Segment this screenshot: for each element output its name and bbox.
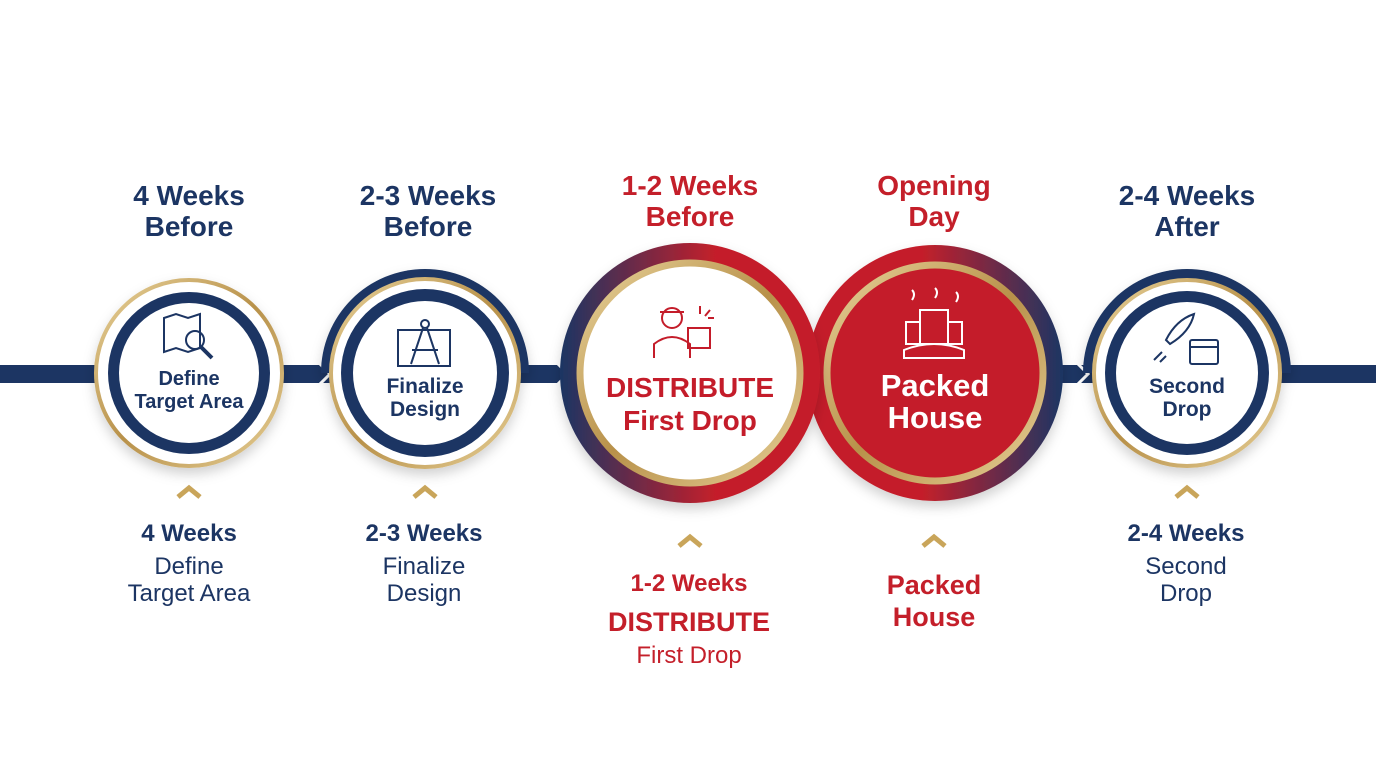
step 3 circle: First Drop bbox=[623, 405, 757, 436]
arrow 3 bbox=[1076, 362, 1088, 386]
step 2 circle: Design bbox=[390, 398, 460, 421]
label: Packed House: Packed bbox=[881, 368, 989, 403]
bottom descriptions: Finalize bbox=[383, 553, 465, 580]
top labels: Before bbox=[384, 211, 472, 242]
icon: rocket calendar bbox=[1154, 314, 1218, 364]
bottom descriptions: Target Area bbox=[128, 580, 251, 607]
arrow 2 bbox=[556, 362, 568, 386]
top labels bbox=[133, 170, 1255, 242]
step 3 circle bbox=[560, 243, 820, 503]
step 4 circle: House bbox=[888, 400, 982, 435]
top labels: 2-4 Weeks bbox=[1119, 180, 1255, 211]
timeline bar bbox=[0, 365, 1376, 383]
bottom descriptions: Packed bbox=[887, 570, 981, 600]
label: Finalize Design: Finalize bbox=[386, 375, 464, 398]
step 2 circle bbox=[321, 269, 529, 467]
step 4 circle bbox=[807, 245, 1063, 501]
icon: delivery person bbox=[654, 306, 714, 358]
bottom descriptions: 2-3 Weeks bbox=[366, 520, 482, 547]
icon: map magnifier bbox=[164, 314, 212, 358]
label: Second Drop: Second bbox=[1149, 375, 1225, 398]
icon: compass blueprint bbox=[398, 320, 450, 366]
step 1 circle: Target Area bbox=[135, 391, 244, 413]
label: Define Target Area: Define bbox=[158, 368, 220, 390]
bottom descriptions: 2-4 Weeks bbox=[1128, 520, 1244, 547]
bottom descriptions bbox=[128, 520, 1244, 669]
step 1 circle bbox=[96, 280, 282, 466]
top labels: 1-2 Weeks bbox=[622, 170, 758, 201]
bottom descriptions: First Drop bbox=[636, 642, 742, 669]
label: DISTRIBUTE First Drop: DISTRIBUTE bbox=[606, 372, 774, 403]
bottom descriptions: Design bbox=[387, 580, 461, 607]
bottom descriptions: Drop bbox=[1160, 580, 1212, 607]
step 5 circle bbox=[1083, 269, 1291, 466]
icon: packed building crowd bbox=[904, 288, 964, 358]
top labels: Opening bbox=[877, 170, 991, 201]
top labels: 2-3 Weeks bbox=[360, 180, 496, 211]
top labels: Before bbox=[145, 211, 233, 242]
top labels: Day bbox=[908, 201, 960, 232]
bottom descriptions: Second bbox=[1145, 553, 1227, 580]
top labels: After bbox=[1154, 211, 1220, 242]
step 5 circle: Drop bbox=[1162, 398, 1212, 421]
bottom descriptions: House bbox=[893, 602, 975, 632]
bottom descriptions: Define bbox=[154, 553, 224, 580]
top labels: Before bbox=[646, 201, 734, 232]
top labels: 4 Weeks bbox=[133, 180, 245, 211]
bottom descriptions: 1-2 Weeks bbox=[631, 570, 747, 597]
gold chevrons bbox=[178, 488, 1198, 546]
arrow 1 bbox=[318, 362, 330, 386]
bottom descriptions: DISTRIBUTE bbox=[608, 607, 770, 637]
bottom descriptions: 4 Weeks bbox=[141, 520, 237, 547]
